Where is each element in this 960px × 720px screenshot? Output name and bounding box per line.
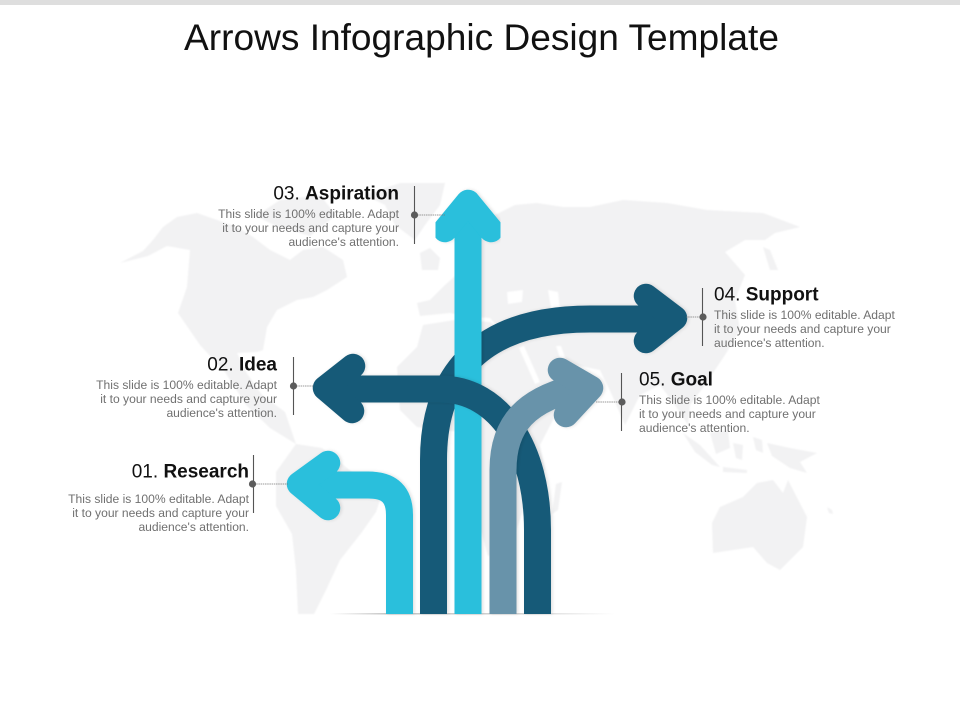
label 03: aspiration: This slide is 100% editable. Adapt — [218, 207, 400, 221]
label 03: aspiration: 03. Aspiration — [273, 184, 399, 204]
label 04: support: audience's attention. — [714, 336, 825, 350]
label 01: research: 01. Research — [132, 462, 249, 482]
label 04: support: it to your needs and capture your — [714, 322, 891, 336]
label 02: idea: audience's attention. — [166, 406, 277, 420]
arrow 02: idea — [325, 366, 538, 614]
label 02: idea: it to your needs and capture your — [100, 392, 277, 406]
label 03: aspiration: it to your needs and capture your — [222, 221, 399, 235]
title: Arrows Infographic Design Template — [184, 16, 779, 58]
label 01: research: it to your needs and capture your — [72, 506, 249, 520]
label 03: aspiration: audience's attention. — [288, 235, 399, 249]
arrow 04: support — [434, 296, 675, 614]
label 05: goal: it to your needs and capture your — [639, 407, 816, 421]
label 01: research: audience's attention. — [138, 520, 249, 534]
label 02: idea: 02. Idea — [207, 354, 277, 376]
baseline — [330, 613, 615, 614]
label 04: support: This slide is 100% editable. Adapt — [714, 308, 895, 322]
arrow 05: goal — [503, 370, 591, 614]
label 05: goal: 05. Goal — [639, 370, 713, 390]
label 02: idea — [96, 354, 314, 420]
label 02: idea: This slide is 100% editable. Adapt — [96, 378, 278, 392]
label 04: support: 04. Support — [714, 284, 819, 306]
top bar — [0, 0, 960, 5]
arrow 01: research — [299, 463, 400, 614]
label 01: research: This slide is 100% editable. Adapt — [68, 492, 250, 506]
arrow 03: aspiration — [445, 202, 491, 614]
label 05: goal: audience's attention. — [639, 421, 750, 435]
label 05: goal — [596, 370, 820, 435]
world map — [120, 183, 833, 614]
label 03: aspiration — [218, 184, 445, 249]
label 05: goal: This slide is 100% editable. Adapt — [639, 393, 820, 407]
label 01: research — [68, 455, 288, 534]
label 04: support — [686, 284, 895, 350]
